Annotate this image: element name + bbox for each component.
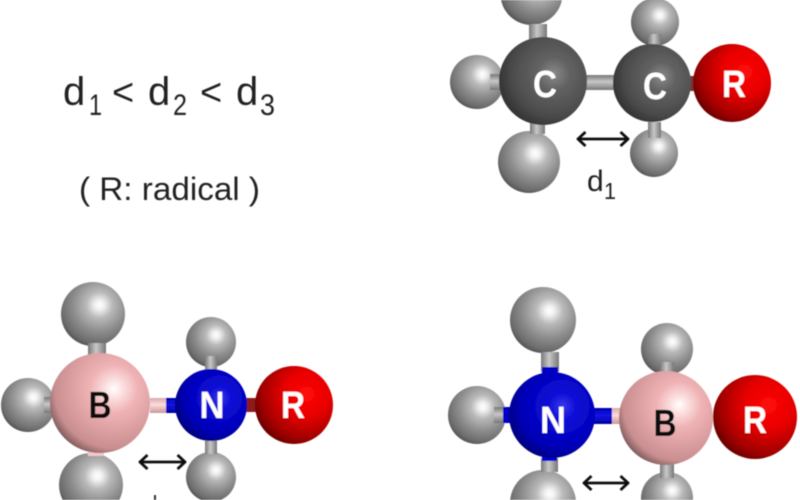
nitrogen atom: N (200, 385, 224, 427)
radical atom: R (722, 64, 746, 106)
heading: distance inequality: d (148, 70, 170, 114)
heading: distance inequality: < (200, 72, 222, 114)
heading: distance inequality: 3 (260, 89, 275, 122)
heading: distance inequality: 2 (173, 89, 187, 122)
radical atom (255, 366, 333, 444)
carbon atom right: C (643, 66, 667, 108)
molecule 3: N-B-R (448, 287, 797, 500)
nitrogen atom: N (540, 400, 566, 442)
radical atom (713, 375, 797, 459)
boron atom: B (88, 385, 112, 427)
arrow d3 (584, 482, 628, 484)
molecule 1: ethyl C-C-R (450, 0, 771, 204)
arrow d2 (140, 461, 185, 463)
carbon atom left: C (533, 64, 557, 106)
nitrogen atom (175, 369, 247, 441)
heading: distance inequality: d (236, 70, 258, 114)
boron atom: B (654, 403, 676, 445)
label d1: 1 (604, 178, 616, 204)
bonds (44, 343, 258, 456)
heading: distance inequality: 1 (89, 89, 102, 122)
bonds (490, 24, 700, 138)
hydrogen atoms (448, 287, 693, 500)
hydrogen atoms (1, 282, 236, 500)
bonds (494, 352, 674, 478)
heading: distance inequality: < (112, 72, 134, 114)
note: R radical: ( R: radical ) (79, 171, 260, 207)
carbon atom right (613, 44, 691, 122)
label d2 (cropped) (154, 495, 156, 500)
molecule 2: B-N-R (1, 282, 333, 500)
radical atom: R (743, 400, 767, 442)
nitrogen atom (503, 367, 595, 461)
radical atom (693, 44, 771, 122)
radical atom: R (281, 385, 305, 427)
boron atom (50, 353, 150, 453)
carbon atom left (499, 37, 587, 125)
heading: distance inequality (63, 70, 275, 122)
label d1 (587, 165, 616, 204)
heading: distance inequality: d (63, 70, 85, 114)
hydrogen atoms (450, 0, 679, 193)
boron atom (619, 371, 713, 465)
arrow d1 (578, 138, 628, 140)
label d1: d (587, 165, 604, 198)
